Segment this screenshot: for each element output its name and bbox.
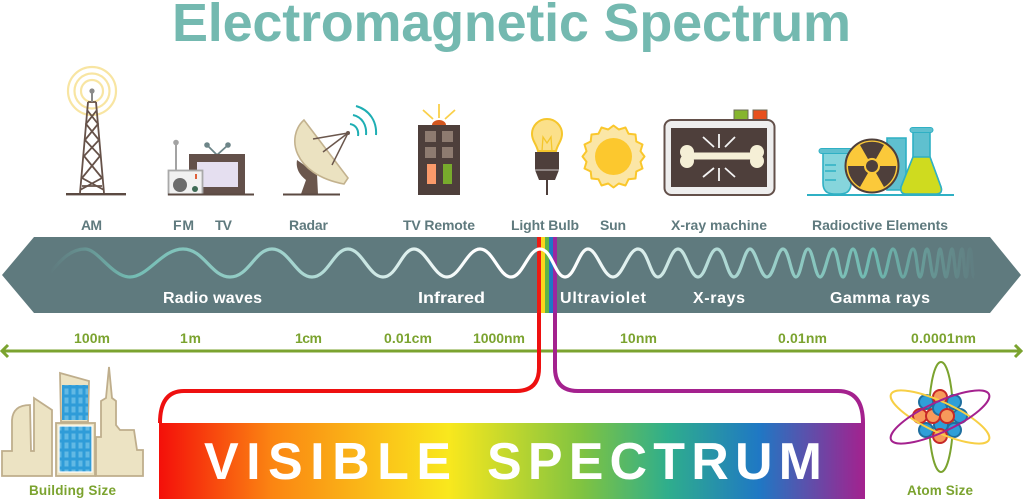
band labels: Radio waves (163, 290, 262, 307)
icon: x-ray machine (664, 110, 774, 195)
scale labels: 0.01nm (778, 330, 827, 346)
device labels: Radar (289, 217, 329, 233)
icon: sun (582, 126, 644, 188)
icon: radar dish (283, 106, 376, 196)
scale labels: 1000nm (473, 330, 525, 346)
band labels: Ultraviolet (560, 290, 647, 307)
device labels: TV Remote (403, 217, 475, 233)
scale labels: 1cm (295, 330, 322, 346)
scale labels: 10nm (620, 330, 657, 346)
visible spectrum panel (159, 423, 865, 499)
scale labels: 0.0001nm (911, 330, 976, 346)
scale arrow (2, 345, 1021, 357)
band labels: Infrared (418, 290, 485, 307)
device labels: Sun (600, 217, 626, 233)
band labels: X-rays (693, 290, 745, 307)
device labels: Radioctive Elements (812, 217, 948, 233)
visible spectrum panel: SPECTRUM (487, 433, 822, 491)
scale labels: 1m (180, 330, 201, 346)
icon: atom (885, 362, 995, 472)
icon: radio and TV (168, 140, 254, 196)
visible spectrum connector lines (160, 313, 863, 423)
visible strip in band (537, 237, 557, 313)
band labels: Gamma rays (830, 290, 930, 307)
spectrum band (2, 237, 1021, 313)
scale labels: 100m (74, 330, 110, 346)
device labels: Light Bulb (511, 217, 579, 233)
icon: light bulb (532, 119, 562, 195)
device labels: AM (81, 217, 102, 233)
icon: AM tower (66, 67, 126, 195)
device labels: X-ray machine (671, 217, 767, 233)
visible spectrum panel: VISIBLE (204, 433, 451, 491)
wave (50, 249, 974, 277)
scale labels (74, 330, 976, 346)
band labels (163, 290, 930, 307)
device labels (81, 217, 948, 233)
scale labels: 0.01cm (384, 330, 432, 346)
device labels: FM (173, 217, 194, 233)
icon: building (2, 367, 143, 476)
building size label: Building Size (29, 483, 116, 498)
icon: radioactive elements (807, 128, 954, 196)
atom size label: Atom Size (907, 483, 973, 498)
device labels: TV (215, 217, 233, 233)
icon: TV remote (418, 104, 460, 195)
